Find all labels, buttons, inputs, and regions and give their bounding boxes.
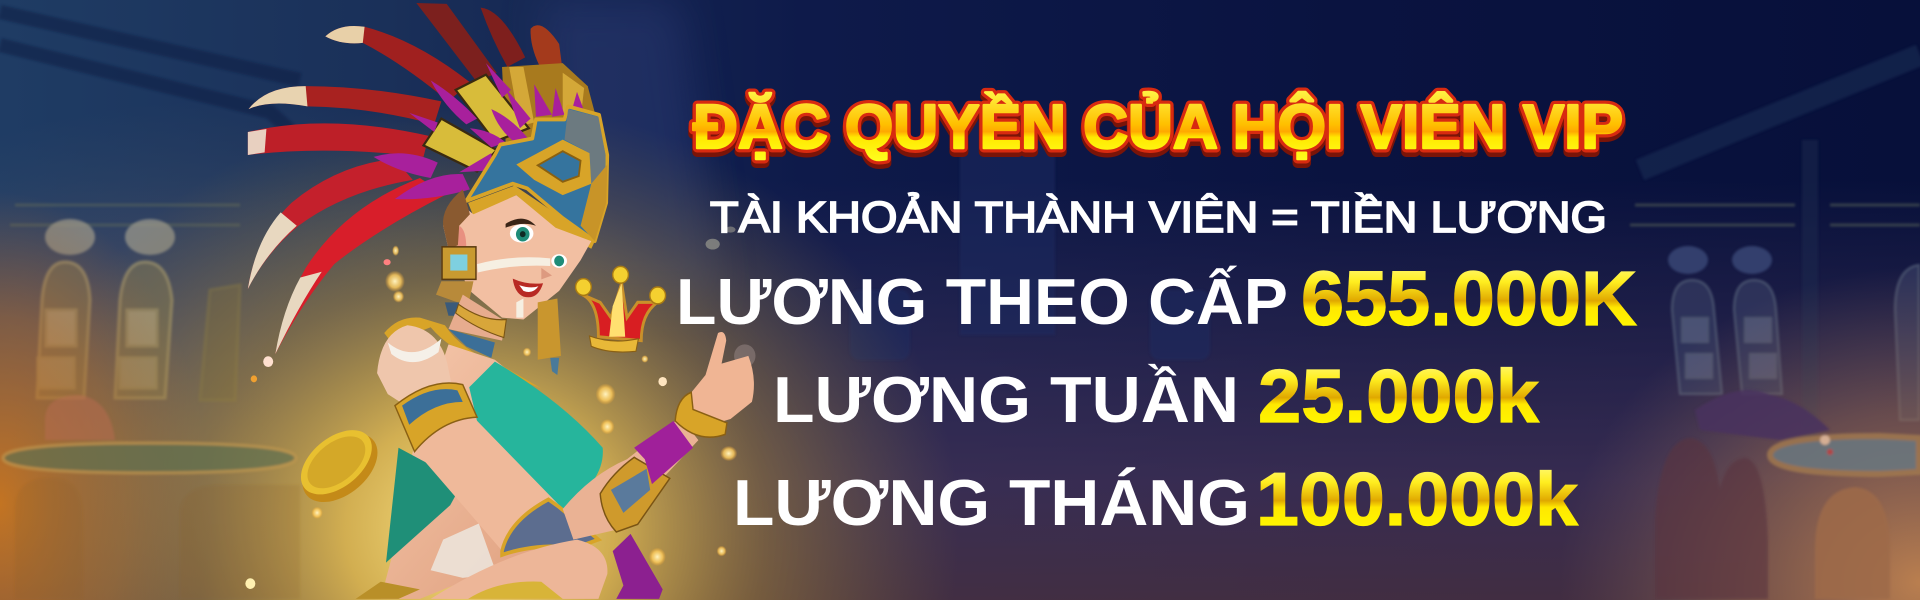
title: ĐẶC QUYỀN CỦA HỘI VIÊN VIP [693, 97, 1623, 166]
right arm, bracer and hand [563, 332, 754, 540]
gold glow behind character [0, 0, 1000, 600]
feathers [248, 3, 562, 354]
row: monthly salary [733, 457, 1578, 541]
row: level salary: 655.000K [1301, 256, 1637, 342]
character: warrior heroine with feather headdress [248, 3, 754, 599]
title: ĐẶC QUYỀN CỦA HỘI VIÊN VIP [693, 93, 1623, 162]
row: weekly salary: LƯƠNG TUẦN [773, 363, 1239, 436]
slot machines right [1668, 246, 1919, 420]
headdress [374, 63, 607, 249]
title: ĐẶC QUYỀN CỦA HỘI VIÊN VIP [693, 93, 1623, 162]
slot machines left [37, 219, 240, 400]
icon: gold coin [290, 417, 389, 516]
neck and collar [384, 295, 541, 388]
row: level salary: LƯƠNG THEO CẤP [676, 265, 1288, 338]
row: weekly salary: 25.000k [1258, 354, 1539, 438]
left arm with armband [377, 325, 598, 555]
row: monthly salary: 100.000k [1256, 457, 1578, 541]
leg and skirt [356, 534, 663, 599]
head and face [443, 189, 591, 320]
torso and top [381, 344, 603, 599]
gaming table left [3, 395, 300, 599]
tan glow right [1560, 250, 1920, 600]
sparkles and bokeh [245, 227, 756, 589]
icon: jester crown [576, 266, 666, 352]
row: level salary [676, 256, 1637, 342]
row: weekly salary [773, 354, 1539, 438]
earrings [436, 247, 561, 375]
row: monthly salary: LƯƠNG THÁNG [733, 466, 1250, 539]
centre hall machines [850, 120, 1210, 360]
subtitle: TÀI KHOẢN THÀNH VIÊN = TIỀN LƯƠNG [710, 192, 1607, 242]
gaming table right [1655, 390, 1919, 599]
orange glow left [0, 120, 300, 600]
